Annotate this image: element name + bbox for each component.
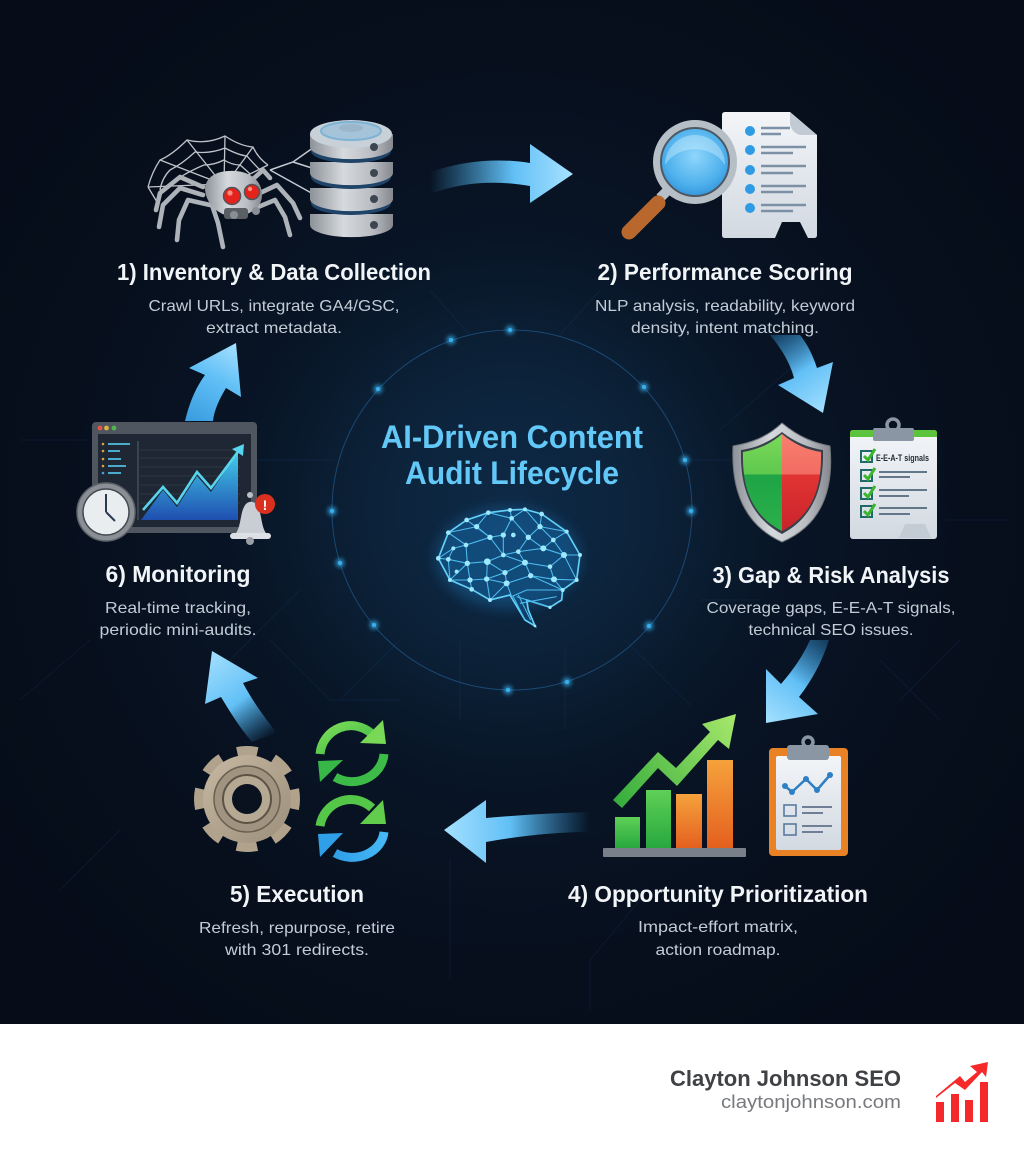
- icon: growth bar chart: [603, 714, 746, 857]
- icon: alert bell: [230, 492, 275, 545]
- icon: orange clipboard: [769, 737, 848, 856]
- icon: alert bell: !: [263, 497, 267, 513]
- icon: neural brain: [436, 507, 582, 627]
- step 4 description: Impact-effort matrix,: [638, 919, 798, 936]
- arrow: step 4 to 5: [444, 800, 590, 863]
- step 2 description: density, intent matching.: [631, 320, 819, 337]
- icon: document: [722, 112, 817, 238]
- step 2 description: NLP analysis, readability, keyword: [595, 298, 855, 315]
- step 3 description: technical SEO issues.: [748, 622, 914, 639]
- circuit nodes: [328, 326, 695, 694]
- icon: E-E-A-T clipboard: [850, 419, 937, 539]
- arrow: step 3 to 4: [766, 640, 829, 723]
- icon: refresh arrows: [318, 720, 386, 857]
- step 6 description: Real-time tracking,: [105, 600, 251, 617]
- icon: magnifying glass: [629, 124, 733, 232]
- icon: gear: [200, 752, 294, 846]
- step 1 heading: 1) Inventory & Data Collection: [117, 259, 431, 285]
- step 3 heading: 3) Gap & Risk Analysis: [712, 562, 950, 588]
- step 1 description: [148, 298, 400, 337]
- arrow: step 6 to 1: [185, 343, 241, 421]
- arrow: step 1 to 2: [430, 144, 573, 203]
- step 2 description: [595, 298, 855, 337]
- icon: clock: [77, 483, 135, 541]
- step 3 description: [706, 600, 956, 639]
- step 1 description: Crawl URLs, integrate GA4/GSC,: [148, 298, 400, 315]
- step 6 description: periodic mini-audits.: [100, 622, 256, 639]
- step 2 heading: 2) Performance Scoring: [598, 259, 852, 285]
- step 6 description: [100, 600, 256, 639]
- step 1 description: extract metadata.: [206, 320, 342, 337]
- step 5 heading: 5) Execution: [230, 881, 364, 907]
- step 5 description: [199, 920, 395, 959]
- arrow: step 2 to 3: [770, 335, 833, 413]
- footer band: [0, 1024, 1024, 1154]
- step 5 description: with 301 redirects.: [224, 942, 369, 959]
- step 6 heading: 6) Monitoring: [106, 561, 250, 587]
- footer brand name: Clayton Johnson SEO: [670, 1066, 901, 1091]
- icon: shield: [733, 423, 831, 542]
- title: [381, 419, 643, 491]
- icon: database: [310, 120, 393, 237]
- title: AI-Driven Content: [381, 419, 643, 455]
- step 3 description: Coverage gaps, E-E-A-T signals,: [706, 600, 956, 617]
- footer logo: red growth chart: [936, 1062, 988, 1122]
- step 4 description: [638, 919, 798, 959]
- step 4 description: action roadmap.: [656, 942, 780, 959]
- step 5 description: Refresh, repurpose, retire: [199, 920, 395, 937]
- title: Audit Lifecycle: [405, 455, 619, 491]
- arrow: step 5 to 6: [205, 651, 277, 742]
- central circuit ring: [20, 290, 1010, 1010]
- icon: spider with web: [148, 136, 317, 247]
- footer url: claytonjohnson.com: [721, 1091, 901, 1112]
- icon: E-E-A-T clipboard: E-E-A-T signals: [876, 453, 929, 464]
- icon: monitor dashboard: [92, 422, 257, 533]
- step 4 heading: 4) Opportunity Prioritization: [568, 881, 868, 907]
